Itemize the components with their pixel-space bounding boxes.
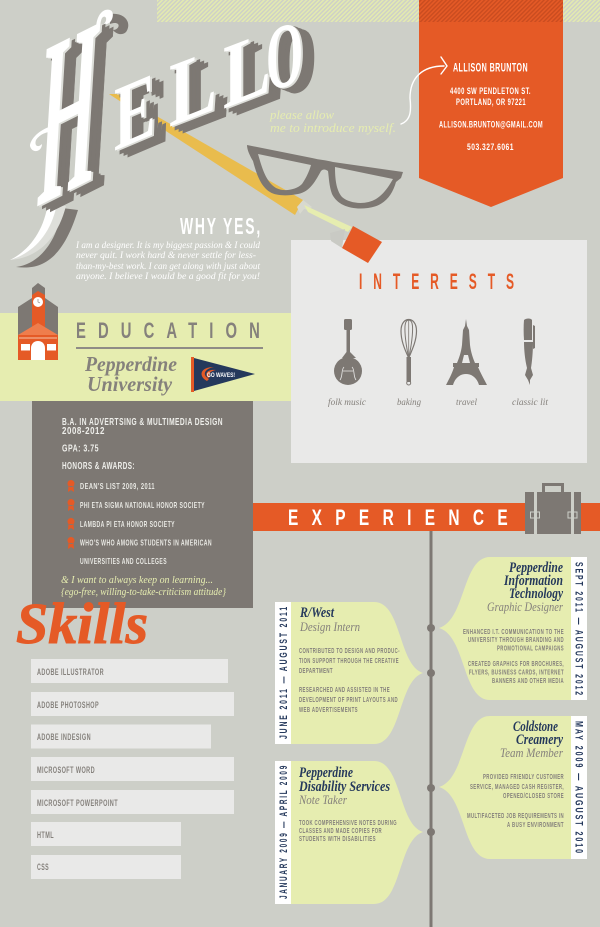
letter O: O (268, 0, 305, 112)
dates: JANUARY 2009 — APRIL 2009 (278, 764, 290, 899)
glasses (247, 145, 403, 208)
skill: css: CSS (37, 862, 49, 873)
tagline: me to introduce myself. (270, 120, 396, 135)
duties: CONTRIBUTED TO DESIGN AND PRODUC- (299, 646, 400, 655)
contact text: PORTLAND, OR 97221 (456, 97, 526, 108)
degree and honors: HONORS & AWARDS: (62, 461, 135, 472)
icon: whisk (401, 320, 416, 385)
interest labels: classic lit (512, 398, 548, 408)
letter E: E (127, 58, 169, 177)
duties: TION SUPPORT THROUGH THE CREATIVE (299, 656, 399, 665)
awards list: WHO'S WHO AMONG STUDENTS IN AMERICAN (80, 538, 212, 548)
letter E: E (123, 57, 165, 176)
degree and honors: GPA: 3.75 (62, 444, 99, 454)
letter O: O (271, 1, 308, 113)
employer: Information (503, 573, 563, 589)
card: Pepperdine IT (439, 557, 587, 700)
education band (0, 313, 291, 401)
icon: suitcase (525, 483, 581, 534)
duties: WEB ADVERTISEMENTS (299, 705, 358, 714)
skill: powerpoint (31, 790, 234, 814)
skill: html: HTML (37, 830, 54, 841)
letter O: O (279, 4, 316, 116)
intro paragraph: anyone. I believe I would be a good fit for you! (76, 271, 260, 282)
employer (513, 719, 563, 748)
interests panel (291, 240, 587, 463)
contact text: ALLISON BRUNTON (453, 62, 528, 74)
job title: Design Intern (299, 619, 360, 634)
university name (84, 352, 177, 396)
university name: University (87, 372, 173, 396)
degree and honors: 2008-2012 (62, 426, 105, 437)
duties: DEPARTMENT (299, 666, 333, 675)
contact text (439, 62, 543, 153)
icon: eiffel tower (446, 319, 487, 385)
letter E: E (119, 55, 161, 174)
icon: fountain pen (524, 318, 535, 385)
contact text: 4400 SW PENDLETON ST. (450, 86, 531, 97)
timeline (427, 531, 435, 927)
pennant: GO WAVES! (207, 372, 235, 379)
skill: illustrator: ADOBE ILLUSTRATOR (37, 667, 104, 678)
learning note: & I want to always keep on learning... (61, 575, 213, 586)
job title: Note Taker (298, 792, 348, 807)
card: Coldstone Creamery (439, 716, 587, 859)
interest labels (328, 397, 548, 408)
card: R/West (275, 602, 423, 744)
university name: Pepperdine (84, 352, 177, 376)
employer (298, 765, 390, 795)
skill: indesign (31, 724, 211, 748)
intro paragraph: than-my-best work. I can get along with just about (76, 262, 260, 272)
intro paragraph (75, 241, 260, 282)
interest labels: folk music (328, 397, 367, 408)
letter L: L (169, 27, 217, 148)
dates: SEPT 2011 — AUGUST 2012 (572, 562, 584, 697)
skill: illustrator (31, 659, 228, 683)
learning note: {ego-free, willing-to-take-criticism attitude} (61, 587, 226, 598)
employer: Technology (509, 586, 563, 602)
skill: word (31, 757, 234, 781)
letter L: L (182, 33, 230, 154)
duties: TOOK COMPREHENSIVE NOTES DURING (299, 818, 397, 827)
skills heading: Skills (16, 591, 148, 656)
duties (467, 772, 564, 829)
letter O: O (275, 3, 312, 114)
awards list (80, 481, 212, 566)
duties: DEVELOPMENT OF PRINT LAYOUTS AND (299, 695, 398, 704)
dates: MAY 2009 — AUGUST 2010 (572, 721, 584, 855)
letter E: E (114, 52, 156, 171)
letter H swashes (10, 10, 128, 268)
icon: school building (18, 283, 58, 360)
skill: word: MICROSOFT WORD (37, 765, 95, 776)
employer: Coldstone (513, 719, 558, 735)
employer: Creamery (516, 732, 563, 748)
experience band (253, 503, 600, 531)
awards list: LAMBDA PI ETA HONOR SOCIETY (80, 519, 175, 529)
letter L: L (225, 10, 273, 131)
employer: R/West (299, 605, 335, 621)
duties (299, 818, 397, 843)
duties: STUDENTS WITH DISABILITIES (299, 834, 376, 843)
contact ribbon (419, 0, 563, 207)
awards list: PHI ETA SIGMA NATIONAL HONOR SOCIETY (80, 500, 205, 510)
card: Pepperdine Disability Services (275, 761, 423, 904)
letter L: L (174, 30, 222, 151)
skill: css (31, 855, 181, 879)
job title: Graphic Designer (487, 599, 564, 614)
degree and honors (62, 417, 223, 472)
arrow to contact (401, 57, 447, 124)
duties: RESEARCHED AND ASSISTED IN THE (299, 685, 390, 694)
interest labels: baking (397, 398, 421, 408)
job title: Team Member (500, 745, 564, 760)
tagline (269, 107, 396, 135)
employer: Disability Services (298, 779, 390, 795)
letter E: E (116, 53, 158, 172)
skill: photoshop: ADOBE PHOTOSHOP (37, 700, 99, 711)
hatched top strip (157, 0, 600, 22)
intro paragraph: I am a designer. It is my biggest passion & I could (75, 241, 260, 251)
employer (503, 560, 563, 602)
title: Hello (10, 0, 316, 268)
letter O: O (266, 0, 303, 111)
contact text: 503.327.6061 (467, 142, 514, 153)
letter L: L (171, 28, 219, 149)
learning note (61, 575, 226, 598)
pencil behind letters (109, 94, 303, 215)
skill: photoshop (31, 692, 234, 716)
dates: JUNE 2011 — AUGUST 2011 (278, 605, 290, 739)
skill: html (31, 822, 181, 846)
tagline: please allow (269, 107, 334, 122)
letter L: L (223, 9, 271, 130)
employer: Pepperdine (299, 765, 353, 781)
intro paragraph: never quit. I work hard & never settle for less- (76, 250, 256, 261)
award ribbon icons (67, 480, 74, 549)
skills bars (31, 659, 234, 879)
employer: Pepperdine (509, 560, 563, 576)
letter L: L (178, 32, 226, 152)
skill: powerpoint: MICROSOFT POWERPOINT (37, 798, 118, 809)
icon: mandolin (334, 319, 362, 385)
duties (463, 627, 564, 685)
letter L: L (228, 12, 276, 133)
degree and honors: B.A. IN ADVERTSING & MULTIMEDIA DESIGN (62, 417, 223, 428)
duties: CLASSES AND MADE COPIES FOR (299, 826, 382, 835)
interest labels: travel (456, 398, 477, 408)
pennant (191, 357, 255, 392)
education heading: EDUCATION (76, 318, 272, 343)
education details panel (32, 401, 253, 608)
duties (299, 646, 400, 714)
letter L: L (236, 15, 284, 136)
pencil tip and eraser (297, 200, 382, 263)
awards list: DEAN'S LIST 2009, 2011 (80, 481, 155, 491)
letter L: L (232, 14, 280, 134)
intro heading: WHY YES, (180, 213, 262, 239)
awards list: UNIVERSITIES AND COLLEGES (80, 556, 167, 566)
skill: indesign: ADOBE INDESIGN (37, 732, 91, 743)
